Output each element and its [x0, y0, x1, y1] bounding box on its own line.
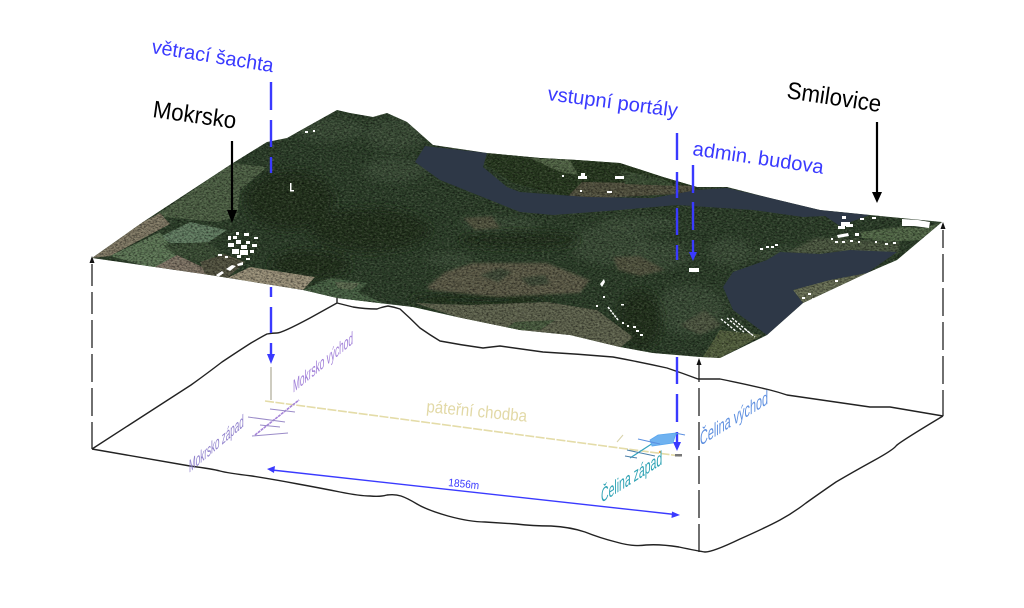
block diagram — [90, 40, 946, 553]
buildings north bank and admin — [562, 173, 699, 272]
label Mokrsko západ: Mokrsko západ — [189, 410, 244, 477]
lower reservoir — [723, 250, 897, 335]
mine shaft vertical — [270, 367, 272, 400]
dark forest patches — [245, 170, 662, 350]
label admin. budova: admin. budova — [691, 138, 826, 179]
label větrací šachta: větrací šachta — [150, 36, 276, 77]
buildings south shore — [596, 279, 755, 337]
arrow to Mokrsko — [227, 141, 237, 223]
1856m dimension arrow — [267, 466, 680, 518]
ridge and slope light patches — [295, 118, 830, 335]
left dashed vertical arrow — [90, 256, 94, 449]
label Mokrsko východ: Mokrsko východ — [293, 327, 353, 397]
dimension label: 1856m — [448, 477, 480, 492]
right dashed vertical arrow — [940, 222, 946, 416]
buildings Smilovice and east bank — [760, 216, 930, 300]
label Čelina východ: Čelina východ — [700, 386, 768, 451]
centre dashed vertical arrow — [696, 358, 702, 552]
label Smilovice: Smilovice — [785, 77, 883, 118]
admin building dashed arrow — [689, 165, 697, 261]
fields near Mokrsko — [92, 163, 385, 304]
main corridor line — [265, 401, 680, 456]
label Čelina západ: Čelina západ — [601, 446, 662, 508]
Mokrsko mine workings — [248, 400, 299, 436]
ventilation shaft dashed arrow — [267, 82, 275, 364]
arrow to Smilovice — [872, 122, 882, 203]
Čelina mine workings — [617, 433, 685, 458]
buildings Mokrsko — [216, 130, 315, 277]
label Mokrsko: Mokrsko — [151, 96, 238, 135]
surface texture — [85, 100, 955, 365]
island north of the reservoir — [483, 153, 697, 198]
terrain aerial surface — [85, 100, 955, 365]
entrance portals dashed arrow — [673, 133, 681, 451]
upper reservoir — [415, 146, 870, 226]
block outline: front edge of the bedrock — [92, 416, 943, 552]
label vstupní portály: vstupní portály — [546, 83, 679, 122]
clearings and southern meadow — [415, 216, 763, 358]
block outline: back edge of the bedrock — [92, 298, 943, 449]
label páteřní chodba: páteřní chodba — [426, 397, 528, 426]
right-hand meadows — [775, 222, 942, 303]
